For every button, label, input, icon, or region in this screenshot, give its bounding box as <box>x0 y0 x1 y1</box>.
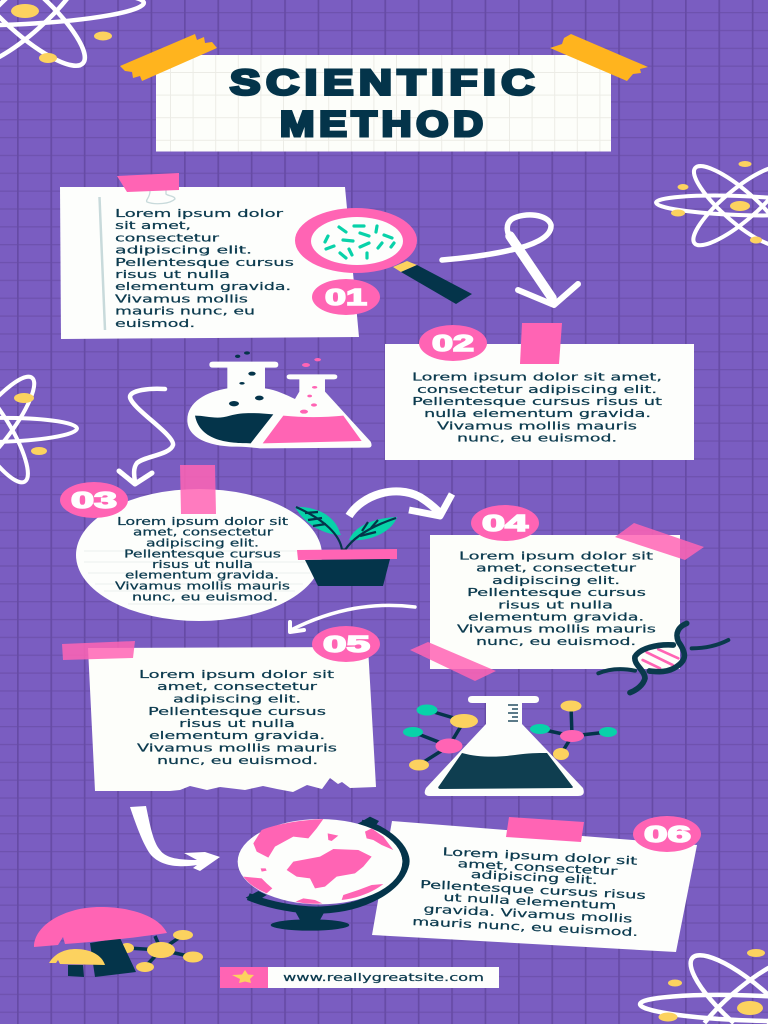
panel: step 02: Vivamus mollis mauris <box>437 420 637 432</box>
panel: step 03: Lorem ipsum dolor sit <box>117 516 288 528</box>
footer: website <box>220 967 499 988</box>
panel: step 02: Lorem ipsum dolor sit amet, <box>412 370 662 384</box>
panel: step 02: nulla elementum gravida. <box>424 407 651 420</box>
panel: step 03: nunc, eu euismod. <box>132 592 278 604</box>
icon: magnifying glass with bacteria <box>295 208 472 304</box>
badge: 06 <box>633 816 701 852</box>
panel: step 05 <box>62 641 376 792</box>
panel: step 06: amet, consectetur <box>457 857 618 878</box>
badge: 01 <box>312 279 380 315</box>
panel: step 05: amet, consectetur <box>157 680 318 693</box>
panel: step 03: risus ut nulla <box>152 559 253 571</box>
icon: atom top left <box>0 0 145 80</box>
icon: flask with molecules <box>403 696 617 796</box>
badge: 04 <box>471 505 539 541</box>
panel: step 06: ut nulla elementum <box>443 891 617 912</box>
icon: flasks <box>187 351 372 448</box>
badge: 02 <box>419 325 487 361</box>
panel: step 03 <box>76 465 322 621</box>
icon: DNA strand <box>598 623 728 693</box>
panel: step 01: Vivamus mollis <box>115 292 248 306</box>
panel: step 01: Pellentesque cursus <box>115 256 294 269</box>
panel: step 01: sit amet, <box>115 219 191 232</box>
panel: step 04 <box>410 523 704 681</box>
arrow: step 2 to 3 <box>119 389 173 484</box>
badge: 02: 02 <box>432 330 474 356</box>
panel: step 06: adipiscing elit. <box>470 868 598 887</box>
panel: step 02: consectetur adipiscing elit. <box>417 383 657 396</box>
icon: atom left <box>0 367 77 491</box>
panel: step 04: nunc, eu euismod. <box>476 635 636 648</box>
panel: step 06: Pellentesque cursus risus <box>420 878 646 902</box>
panel: step 04: Pellentesque cursus <box>467 586 646 599</box>
panel: step 02 <box>385 323 694 460</box>
title panel <box>120 34 648 152</box>
panel: step 05: Lorem ipsum dolor sit <box>139 668 335 681</box>
panel: step 05: risus ut nulla <box>179 717 295 730</box>
badge: 01: 01 <box>325 284 367 310</box>
arrow: step 4 to 5 <box>290 605 415 632</box>
title panel: METHOD <box>280 105 483 144</box>
panel: step 03: Vivamus mollis mauris <box>115 581 290 593</box>
panel: step 05: elementum gravida. <box>149 729 325 742</box>
footer: website: www.reallygreatsite.com <box>283 971 484 984</box>
panel: step 06 <box>372 817 697 952</box>
icon: mushrooms and molecule <box>34 907 203 977</box>
panel: step 03: adipiscing elit. <box>146 538 259 550</box>
panel: step 01: adipiscing elit. <box>115 244 252 256</box>
panel: step 06: mauris nunc, eu euismod. <box>412 915 638 939</box>
badge: 04: 04 <box>482 510 528 536</box>
panel: step 04: Vivamus mollis mauris <box>457 623 656 636</box>
panel: step 05: adipiscing elit. <box>173 692 301 706</box>
badge: 03 <box>60 482 128 518</box>
panel: step 01 <box>60 173 359 339</box>
panel: step 03: Pellentesque cursus <box>124 548 281 560</box>
panel: step 01: mauris nunc, eu <box>115 304 255 318</box>
icon: atom bottom right <box>640 949 768 1024</box>
panel: step 04: elementum gravida. <box>468 611 644 624</box>
panel: step 01: elementum gravida. <box>115 280 291 293</box>
panel: step 01: euismod. <box>115 317 195 330</box>
badge: 06: 06 <box>644 821 691 847</box>
panel: step 05: nunc, eu euismod. <box>157 754 318 767</box>
panel: step 06: gravida. Vivamus mollis <box>423 902 633 926</box>
panel: step 06: Lorem ipsum dolor sit <box>442 845 639 868</box>
panel: step 04: amet, consectetur <box>476 562 637 575</box>
panel: step 02: nunc, eu euismod. <box>457 432 617 444</box>
panel: step 03: elementum gravida. <box>125 570 279 582</box>
icon: atom right <box>656 156 768 256</box>
panel: step 04: risus ut nulla <box>498 598 613 611</box>
icon: potted plant <box>295 507 397 586</box>
arrow: step 5 to 6 <box>130 806 220 871</box>
title panel: SCIENTIFIC <box>230 63 534 102</box>
panel: step 04: adipiscing elit. <box>492 574 620 587</box>
panel: step 04: Lorem ipsum dolor sit <box>459 549 654 562</box>
panel: step 01: risus ut nulla <box>115 268 230 281</box>
badge: 05 <box>312 626 380 662</box>
panel: step 05: Vivamus mollis mauris <box>137 742 337 754</box>
panel: step 01: Lorem ipsum dolor <box>115 207 284 220</box>
panel: step 02: Pellentesque cursus risus ut <box>412 395 663 408</box>
arrow: step 1 to 2 <box>442 215 578 305</box>
arrow: step 3 to 4 <box>349 491 452 516</box>
badge: 05: 05 <box>323 631 370 657</box>
panel: step 01: consectetur <box>115 232 220 244</box>
icon: globe <box>238 817 406 931</box>
panel: step 05: Pellentesque cursus <box>148 705 326 718</box>
panel: step 03: amet, consectetur <box>133 527 274 539</box>
badge: 03: 03 <box>71 487 117 513</box>
